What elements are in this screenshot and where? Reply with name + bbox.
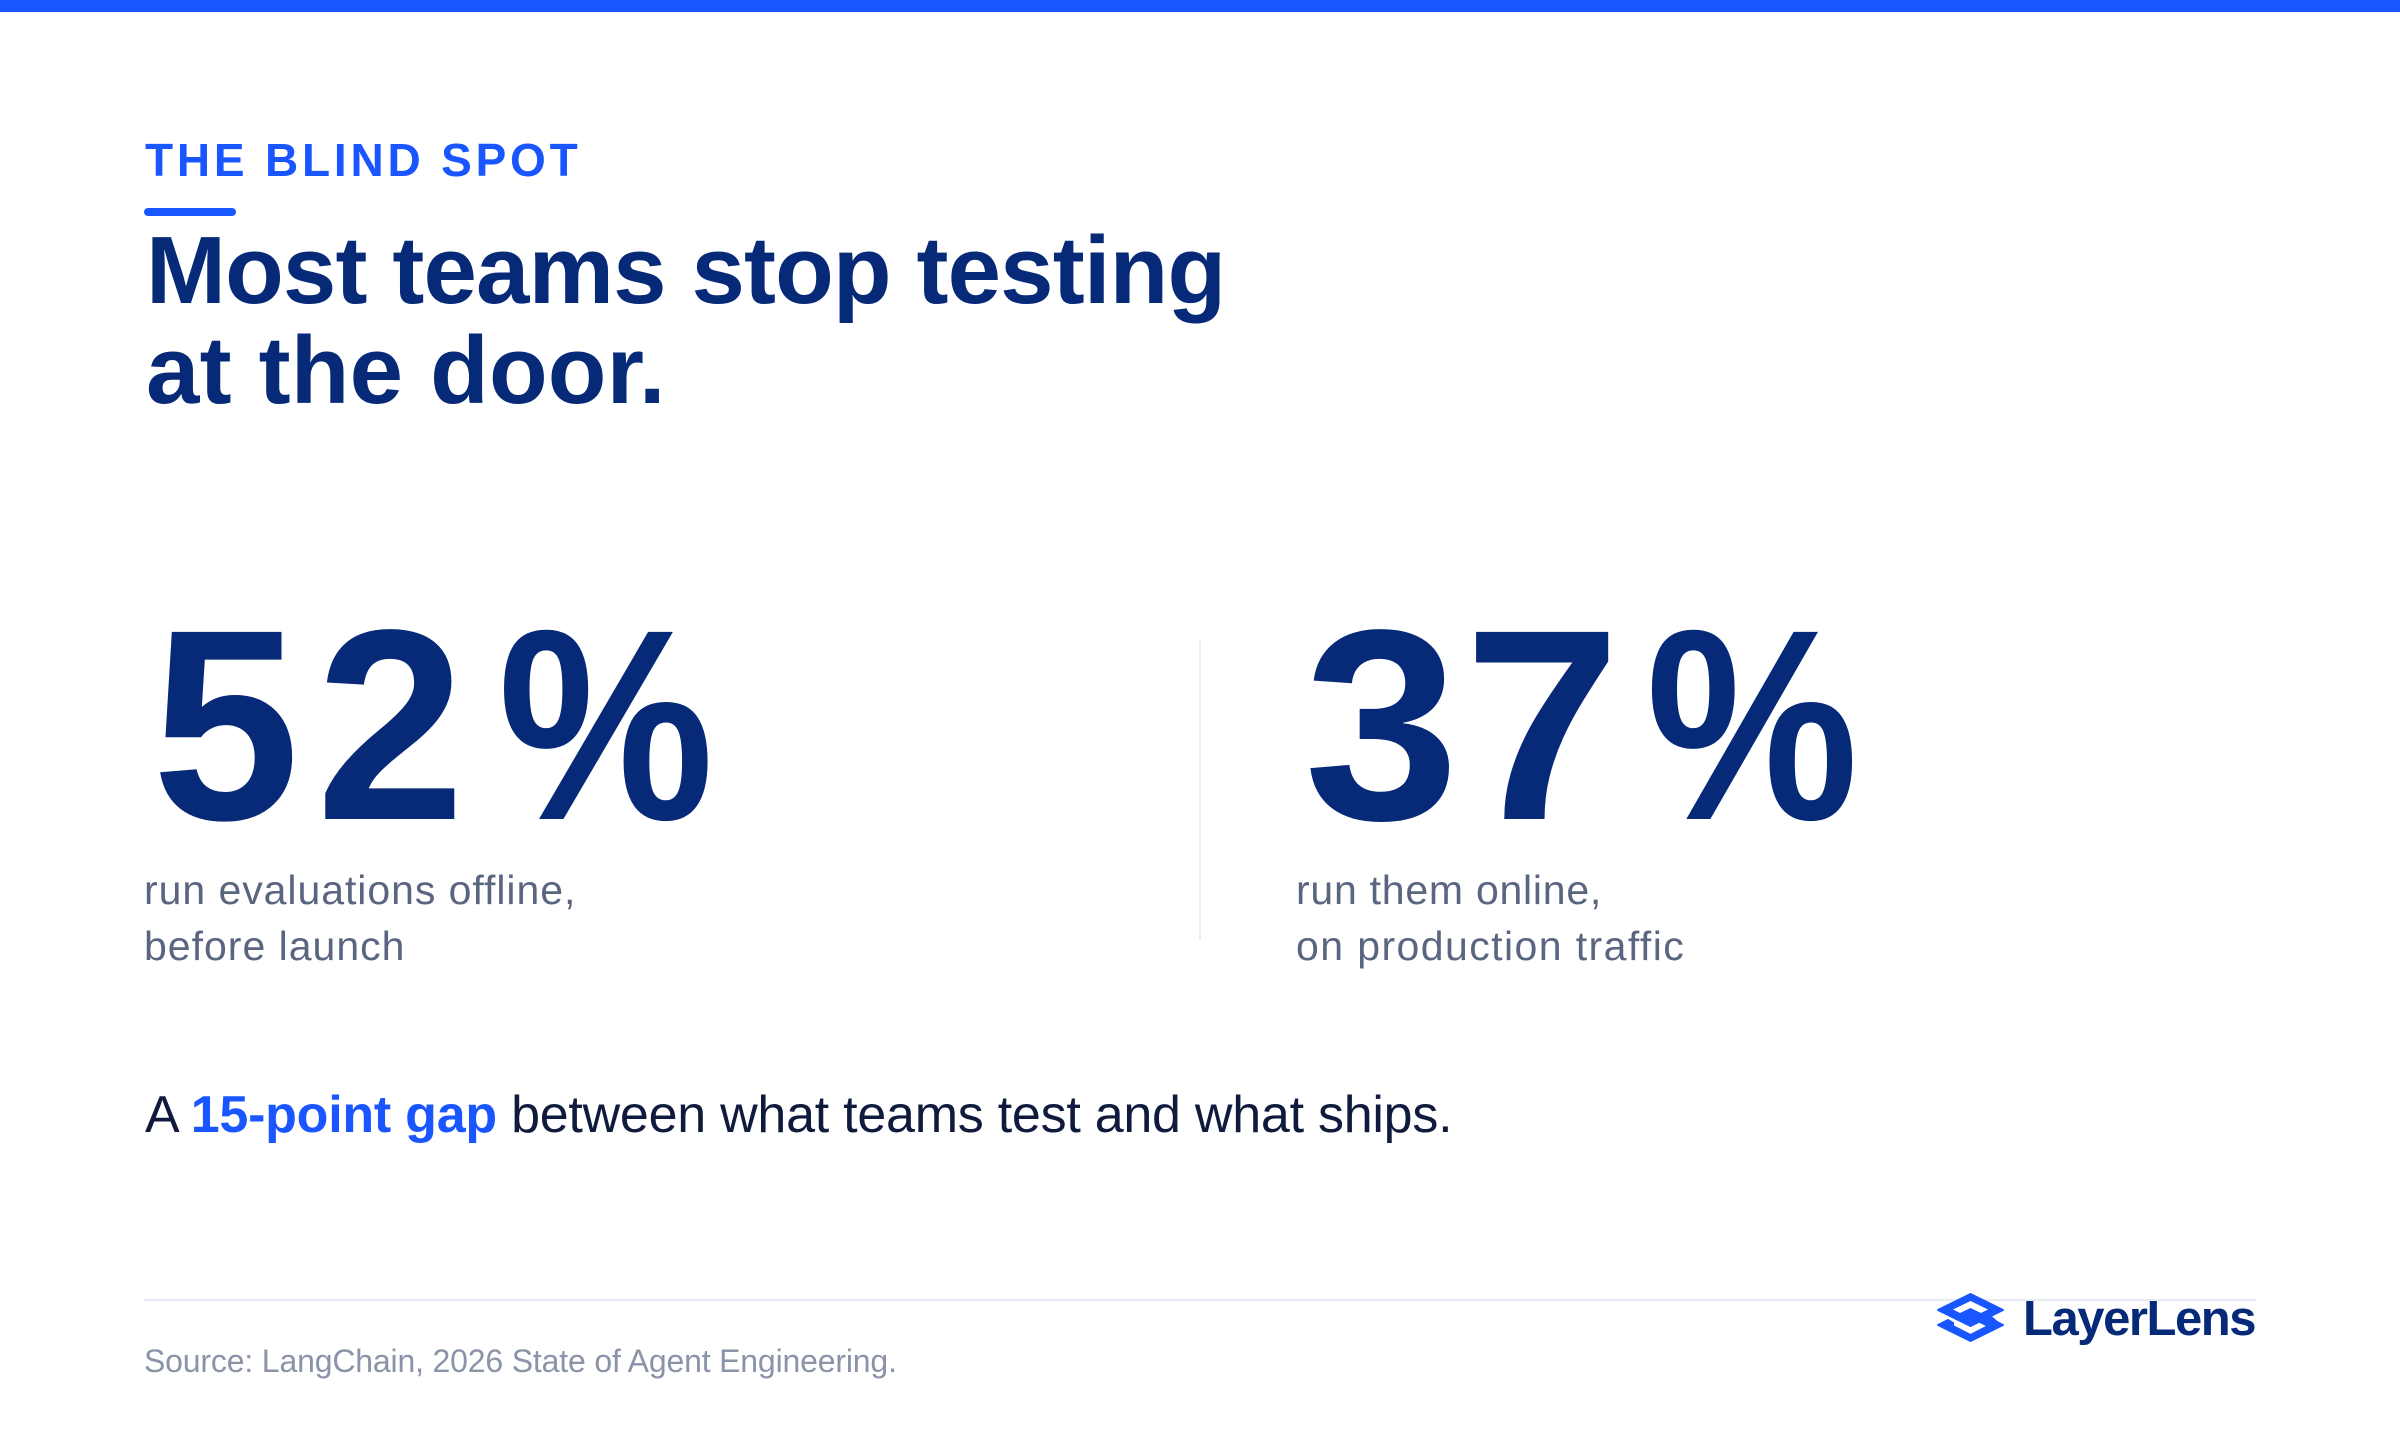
- stat: 52 percent: 2: [316, 573, 465, 877]
- stat: 52 percent: 5: [152, 573, 299, 877]
- heading: Most teams stop testing: [146, 217, 1225, 324]
- column divider: [1199, 640, 1201, 940]
- stat: 52 percent: %: [498, 573, 714, 877]
- eyebrow label: THE BLIND SPOT: [145, 134, 582, 186]
- heading: at the door.: [146, 317, 666, 424]
- label: offline evaluations: [144, 867, 576, 969]
- label: online evaluations: run them online,: [1296, 867, 1602, 913]
- label: online evaluations: on production traffic: [1296, 923, 1685, 969]
- stat: 37 percent: %: [1646, 573, 1858, 877]
- icon: LayerLens layered diamonds logo: [1937, 1293, 2004, 1342]
- stat: 37 percent: 7: [1464, 573, 1621, 877]
- label: online evaluations: [1296, 867, 1685, 969]
- stat: 37 percent: [1304, 573, 1858, 877]
- stat: 52 percent: [152, 573, 714, 877]
- heading: [146, 217, 1225, 424]
- footer rule: [144, 1299, 2256, 1301]
- gap statement: A 15-point gap between what teams test and what ships.: [145, 1086, 1452, 1144]
- label: offline evaluations: before launch: [144, 923, 405, 969]
- stat: 37 percent: 3: [1304, 573, 1459, 877]
- accent underline: [144, 208, 236, 216]
- top accent bar: [0, 0, 2400, 12]
- brand wordmark: LayerLens: [2023, 1292, 2255, 1346]
- label: offline evaluations: run evaluations offline,: [144, 867, 576, 913]
- source note: Source: LangChain, 2026 State of Agent Engineering.: [144, 1343, 897, 1379]
